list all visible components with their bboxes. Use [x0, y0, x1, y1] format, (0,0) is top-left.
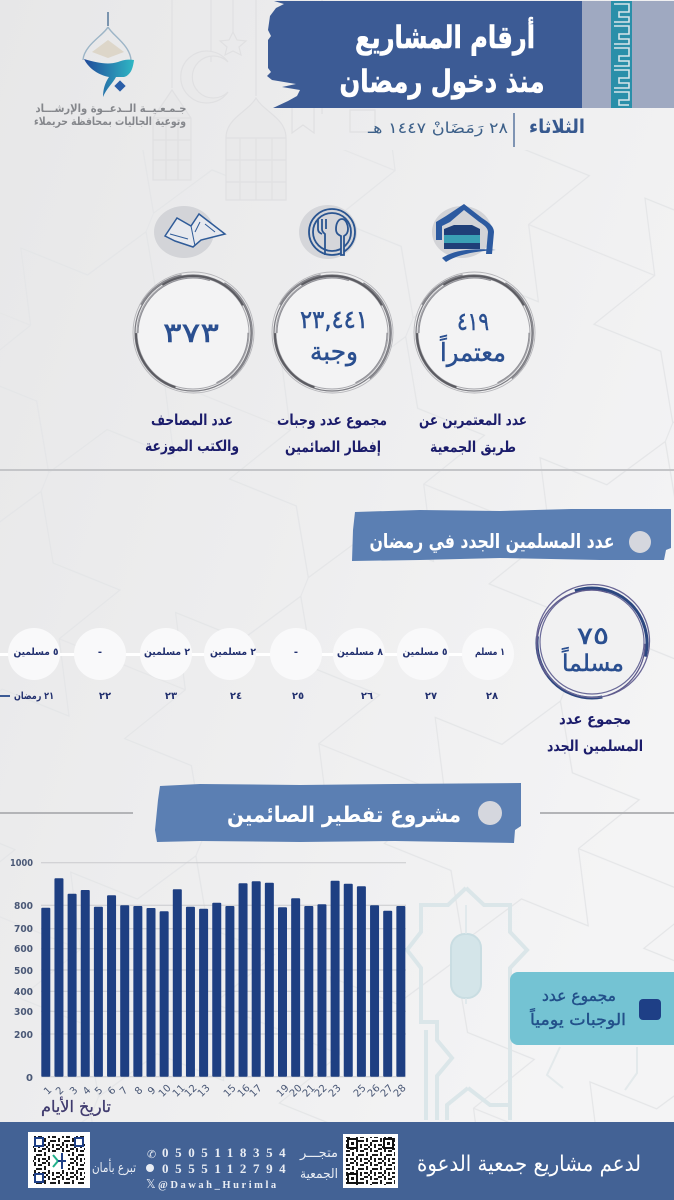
value: ٢٣,٤٤١ — [300, 305, 368, 334]
value: وجبة — [310, 337, 358, 367]
logo mark — [83, 12, 134, 97]
daily counts — [14, 647, 505, 658]
x axis labels: 22 — [313, 1083, 330, 1100]
x axis labels: 27 — [379, 1083, 396, 1100]
y axis labels: 400 — [14, 987, 33, 998]
panel: stat books — [133, 206, 254, 455]
dates — [14, 691, 498, 702]
y axis labels: 300 — [14, 1007, 33, 1018]
contacts: @Dawah_Hurimla — [158, 1180, 279, 1191]
daily counts: ٥ مسلمين — [14, 647, 58, 658]
y axis labels — [10, 858, 33, 1084]
banner dot — [629, 531, 651, 553]
contacts: 0505118354 — [162, 1145, 292, 1160]
label: مجموع عدد — [559, 710, 631, 728]
value: ٣٧٣ — [163, 318, 219, 349]
panel: total new muslims — [536, 584, 650, 755]
logo caption — [34, 102, 186, 128]
header side strip — [582, 1, 674, 108]
value: مسلماً — [561, 647, 624, 677]
contacts: ✆ — [147, 1148, 156, 1161]
decorative lanterns and crescent — [153, 0, 375, 200]
QR code: donation — [28, 1132, 90, 1188]
x axis labels: 6 — [106, 1085, 118, 1097]
label: والكتب الموزعة — [145, 437, 239, 455]
dates: ٢٥ — [292, 691, 304, 702]
store label: متجـــر — [299, 1146, 338, 1161]
value — [439, 307, 506, 367]
x axis labels: 3 — [68, 1085, 80, 1097]
label — [547, 710, 643, 755]
daily counts: ٥ مسلمين — [402, 647, 448, 658]
header banner — [267, 1, 674, 108]
daily counts: - — [294, 647, 298, 658]
x axis title: تاريخ الأيام — [41, 1096, 111, 1117]
banner dot — [478, 801, 502, 825]
x axis labels: 8 — [133, 1085, 145, 1097]
legend — [510, 972, 674, 1045]
x axis labels: 26 — [366, 1083, 383, 1100]
x axis labels: 25 — [352, 1083, 369, 1100]
x axis labels: 12 — [183, 1083, 200, 1100]
ring — [133, 272, 254, 393]
icon: open book — [154, 206, 225, 258]
label: إفطار الصائمين — [285, 438, 381, 456]
contacts: 𝕏 — [146, 1177, 156, 1191]
date line: الثلاثاء — [529, 116, 585, 138]
x axis labels: 23 — [327, 1083, 344, 1100]
x axis labels: 17 — [248, 1083, 265, 1100]
x axis labels: 28 — [392, 1083, 409, 1100]
y axis labels: 500 — [14, 966, 33, 977]
dates: ٢٢ — [99, 691, 111, 702]
daily counts: ٢ مسلمين — [144, 647, 190, 658]
y axis labels: 800 — [14, 901, 33, 912]
legend text: الوجبات يومياً — [529, 1007, 626, 1030]
dates: ٢٦ — [361, 691, 373, 702]
contacts — [146, 1145, 292, 1191]
header title panel — [267, 1, 582, 108]
y axis labels: 600 — [14, 944, 33, 955]
x axis labels: 13 — [196, 1083, 213, 1100]
dates: ٢٧ — [425, 691, 437, 702]
value — [300, 305, 368, 367]
contacts: 0555112794 — [162, 1161, 292, 1176]
section banner: new muslims — [352, 509, 671, 561]
store label: الجمعية — [300, 1167, 338, 1182]
dates: ٢٤ — [230, 691, 242, 702]
legend text: مجموع عدد — [542, 986, 616, 1006]
x axis labels: 5 — [93, 1085, 105, 1097]
x axis labels: 7 — [118, 1085, 130, 1097]
bar chart: daily meals — [10, 858, 409, 1117]
value: معتمراً — [439, 335, 506, 367]
store label — [299, 1146, 338, 1182]
panel: stat meals — [272, 205, 393, 456]
timeline of daily new muslims — [0, 628, 514, 702]
icon: plate and cutlery — [299, 205, 357, 259]
logo caption: جـمـعـيــة الــدعــوة والإرشـــاد — [36, 102, 186, 115]
x axis labels — [42, 1083, 409, 1100]
ring — [536, 584, 650, 698]
dates: ٢٨ — [486, 691, 498, 702]
x axis labels: 10 — [157, 1083, 174, 1100]
title: أرقام المشاريع — [355, 17, 535, 56]
value: ٤١٩ — [457, 307, 489, 336]
x axis labels: 19 — [275, 1083, 292, 1100]
QR code: store — [343, 1134, 398, 1188]
bars — [41, 878, 405, 1077]
x axis labels: 1 — [42, 1085, 54, 1097]
x axis labels: 2 — [54, 1085, 66, 1097]
title — [340, 17, 544, 100]
date line: ٢٨ رَمَضَانْ ١٤٤٧ هـ — [367, 119, 508, 137]
footer call to action: لدعم مشاريع جمعية الدعوة — [417, 1152, 641, 1177]
value — [561, 622, 624, 677]
label — [145, 411, 239, 455]
daily counts: ٢ مسلمين — [210, 647, 256, 658]
x axis labels: 16 — [236, 1083, 253, 1100]
daily counts: - — [98, 647, 102, 658]
x axis labels: 11 — [171, 1083, 188, 1100]
decorative mosque window with lantern — [407, 888, 637, 1120]
section banner: iftar — [0, 783, 674, 843]
legend text — [529, 986, 626, 1030]
x axis labels: 15 — [222, 1083, 239, 1100]
y axis labels: 0 — [26, 1073, 33, 1084]
label: المسلمين الجدد — [547, 737, 643, 755]
ring — [272, 272, 393, 393]
daily counts: ١ مسلم — [475, 647, 505, 658]
label: مجموع عدد وجبات — [277, 411, 387, 429]
y axis labels: 200 — [14, 1030, 33, 1041]
logo — [34, 12, 186, 128]
logo caption: وتوعية الجاليات بمحافظة حريملاء — [34, 115, 186, 128]
y axis labels: 700 — [14, 924, 33, 935]
x axis labels: 4 — [81, 1085, 93, 1097]
y grid lines — [41, 863, 406, 1077]
x axis labels: 21 — [301, 1083, 318, 1100]
y axis labels: 1000 — [10, 858, 33, 869]
panel: stat umrah — [414, 204, 535, 456]
dates: ٢١ رمضان — [14, 691, 54, 702]
legend swatch — [639, 999, 661, 1020]
dates: ٢٣ — [165, 691, 177, 702]
x axis labels: 9 — [146, 1085, 158, 1097]
label: عدد المصاحف — [151, 411, 233, 429]
banner title: مشروع تفطير الصائمين — [227, 803, 461, 828]
label: عدد المعتمرين عن — [419, 411, 527, 429]
date line — [367, 113, 585, 147]
title: منذ دخول رمضان — [340, 64, 544, 100]
donation label: تبرع بأمان — [92, 1158, 136, 1176]
x axis labels: 20 — [288, 1083, 305, 1100]
icon: kaaba — [432, 204, 496, 262]
label — [277, 411, 387, 456]
label: طريق الجمعية — [430, 438, 516, 456]
footer — [0, 1122, 674, 1200]
value: ٧٥ — [577, 622, 609, 650]
ring — [414, 272, 535, 393]
banner title: عدد المسلمين الجدد في رمضان — [370, 529, 614, 554]
label — [419, 411, 527, 456]
daily counts: ٨ مسلمين — [337, 647, 383, 658]
